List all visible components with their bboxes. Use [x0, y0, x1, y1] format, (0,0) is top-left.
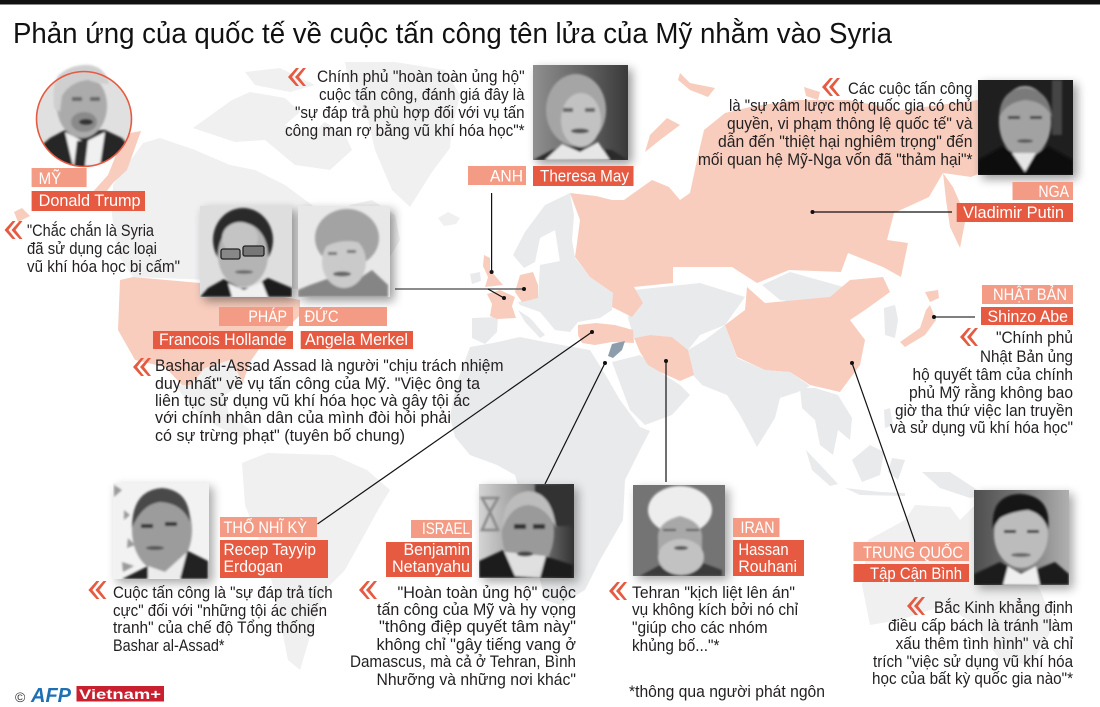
quote: Abe: Nhật Bản ủng [980, 348, 1073, 366]
quote: Netanyahu [350, 584, 576, 689]
label: NHẬT BẢN: NHẬT BẢN [993, 285, 1067, 304]
quote: Netanyahu: "thông điệp quyết tâm này" [379, 618, 576, 636]
top bar [0, 0, 1100, 4]
quote icon [88, 581, 106, 599]
quote: Erdogan: cực" đối với "những tội ác chiến [113, 602, 327, 620]
quote icon [907, 597, 925, 615]
panel: Trung Quốc [854, 490, 1074, 688]
quote: Pháp và Đức: Bashar al-Assad Assad là người "chịu trách nhiệm [155, 357, 504, 375]
label: ANH: ANH [490, 166, 523, 186]
quote: Pháp và Đức: duy nhất" về vụ tấn công của Mỹ. "Việc ông ta [155, 375, 481, 393]
label: Vladimir Putin: Vladimir Putin [963, 203, 1064, 222]
label: Hassan Rouhani [733, 540, 804, 576]
map: UK [483, 255, 503, 287]
quote icon [960, 328, 978, 346]
photo: Hollande [200, 206, 296, 301]
photo: Erdogan [113, 483, 213, 583]
quote: Putin [698, 80, 973, 169]
quote: Xi: điều cấp bách là tránh "làm [888, 617, 1073, 635]
map: USA [14, 131, 300, 385]
quote: Putin: quyền, vi phạm thông lệ quốc tế" và [727, 115, 973, 133]
photo: Putin [978, 80, 1077, 179]
quote: Rouhani: "giúp cho các nhóm [632, 619, 768, 637]
label: Shinzo Abe: Shinzo Abe [988, 307, 1068, 326]
footnote: *thông qua người phát ngôn [629, 683, 825, 701]
label: Angela Merkel: Angela Merkel [305, 330, 408, 349]
quote: Rouhani: vụ không kích bởi nó chỉ [632, 601, 798, 619]
label: THỔ NHĨ KỲ: THỔ NHĨ KỲ [224, 518, 307, 537]
map: Japan [900, 290, 939, 347]
label: Hassan Rouhani: Hassan [738, 540, 789, 559]
quote: Abe: hộ quyết tâm của chính [912, 366, 1073, 384]
map: Russia [570, 73, 1020, 317]
quote: Putin: dẫn đến "thiệt hại nghiêm trọng" đến [718, 132, 972, 151]
panel: Thổ Nhĩ Kỳ [88, 483, 333, 655]
label: TRUNG QUỐC: TRUNG QUỐC [863, 542, 963, 562]
quote: Xi: trích "việc sử dụng vũ khí hóa [873, 653, 1074, 671]
quote: Netanyahu: "Hoàn toàn ủng hộ" cuộc [398, 584, 576, 602]
label: Donald Trump: Donald Trump [39, 191, 141, 210]
quote: Putin: mối quan hệ Mỹ-Nga vốn đã "thảm hại"* [698, 151, 973, 169]
quote: Xi: xấu thêm tình hình" và chỉ [896, 635, 1073, 653]
quote: Trump: đã sử dụng các loại [27, 240, 157, 258]
quote: Abe [890, 329, 1073, 437]
label: Theresa May: Theresa May [540, 166, 629, 186]
photo: Merkel [298, 206, 394, 301]
map: Turkey [578, 323, 634, 345]
panel: Nhật Bản [890, 285, 1073, 437]
photo: Theresa May [533, 65, 632, 164]
label: Benjamin Netanyahu: Benjamin [404, 540, 470, 559]
quote: May: Chính phủ "hoàn toàn ủng hộ" [317, 68, 525, 86]
map: pale grey north and south lands [112, 62, 1055, 670]
quote: Pháp và Đức: có sự trừng phạt" (tuyên bố chung) [155, 427, 405, 445]
quote: Netanyahu: tấn công của Mỹ và hy vọng [377, 601, 576, 619]
logo: AFP Vietnam+ [15, 685, 164, 707]
logo: AFP Vietnam+: Vietnam+ [79, 686, 161, 702]
quote: Netanyahu: Damascus, mà cả ở Tehran, Bình [350, 653, 576, 671]
quote: Pháp và Đức: với chính nhân dân của mình đòi hỏi phải [155, 409, 451, 427]
icon: quote marks [4, 221, 22, 239]
quote: Rouhani: khủng bố..."* [632, 637, 720, 655]
label: Recep Tayyip Erdogan: Erdogan [224, 557, 283, 576]
photo: Netanyahu [479, 484, 578, 582]
label: Benjamin Netanyahu: Netanyahu [392, 557, 470, 576]
label: ISRAEL [411, 519, 472, 538]
quote: Trump: vũ khí hóa học bị cấm" [27, 258, 180, 276]
quote: Erdogan: Bashar al-Assad* [113, 637, 225, 655]
label: ISRAEL: ISRAEL [422, 519, 470, 538]
quote: Netanyahu: không chỉ "gây tiếng vang ở [376, 636, 576, 654]
label: PHÁP: PHÁP [248, 307, 287, 326]
quote: Trump: "Chắc chắn là Syria [27, 221, 155, 240]
label: ĐỨC: ĐỨC [304, 307, 338, 326]
quote: Erdogan: Cuộc tấn công là "sự đáp trả tích [113, 584, 333, 602]
photo: Rouhani [633, 485, 729, 580]
quote: Erdogan [113, 584, 333, 655]
quote: Putin: là "sự xâm lược một quốc gia có chủ [729, 97, 972, 115]
label: MỸ: MỸ [39, 169, 61, 188]
label: PHÁP [219, 307, 293, 326]
photo: Xi Jinping [974, 490, 1073, 589]
label: Francois Hollande: Francois Hollande [159, 330, 287, 349]
quote: May [285, 68, 525, 140]
quote: Xi: Bắc Kinh khẳng định [934, 598, 1073, 617]
panel: Israel [350, 484, 578, 689]
quote: Rouhani [632, 584, 798, 655]
quote: Abe: "Chính phủ [996, 329, 1073, 347]
panel: Trump [4, 65, 180, 276]
label: NGA [1012, 182, 1073, 201]
quote: Rouhani: Tehran "kịch liệt lên án" [632, 584, 795, 602]
panel: Nga [698, 78, 1077, 222]
quote: Trump [27, 221, 180, 276]
label: Recep Tayyip Erdogan [220, 540, 328, 578]
label: Benjamin Netanyahu [386, 540, 472, 577]
label: MỸ [32, 168, 87, 188]
map: China [725, 277, 890, 392]
logo: AFP Vietnam+: AFP [30, 685, 72, 707]
panel: Anh [285, 65, 634, 186]
quote: Netanyahu: Nhưỡng và những nơi khác" [376, 671, 576, 689]
label: Recep Tayyip Erdogan: Recep Tayyip [224, 540, 316, 559]
panel: Pháp và Đức [133, 206, 504, 445]
quote: Abe: giờ tha thứ việc lan truyền [895, 402, 1073, 420]
quote icon [288, 68, 306, 86]
map: grey countries [450, 193, 985, 605]
quote icon [609, 582, 627, 600]
logo: AFP Vietnam+: © [15, 689, 26, 705]
label: NGA: NGA [1038, 182, 1070, 201]
map: Iran [634, 335, 694, 381]
map: Syria [608, 341, 625, 358]
quote: Xi: học của bất kỳ quốc gia nào"* [872, 670, 1074, 688]
photo: Trump [36, 65, 132, 170]
quote icon [133, 358, 151, 376]
quote: May: "sự đáp trả phù hợp đối với vụ tấn [295, 104, 525, 122]
quote: Putin: Các cuộc tấn công [848, 80, 972, 98]
map: France [487, 290, 516, 319]
label: Hassan Rouhani: Rouhani [738, 557, 797, 576]
quote icon [359, 581, 377, 599]
map: Germany [515, 272, 538, 302]
quote: May: cuộc tấn công, đánh giá đây là [319, 86, 525, 104]
label: ANH [468, 166, 526, 186]
label: ĐỨC [299, 307, 387, 326]
quote: May: công man rợ bằng vũ khí hóa học"* [285, 121, 525, 140]
label: IRAN: IRAN [740, 518, 774, 537]
quote: Abe: và sử dụng vũ khí hóa học" [890, 419, 1073, 437]
quote: Pháp và Đức: liên tục sử dụng vũ khí hóa học và gây tội ác [155, 392, 470, 410]
quote: Pháp và Đức [155, 357, 504, 445]
quote: Erdogan: tranh" của chế độ Tổng thống [113, 619, 315, 637]
quote: Abe: phủ Mỹ rằng không bao [909, 383, 1073, 402]
connector lines [318, 193, 975, 542]
quote: Xi [872, 598, 1074, 688]
title: Phản ứng của quốc tế về cuộc tấn công tên lửa của Mỹ nhằm vào Syria [13, 17, 893, 50]
quote icon [822, 78, 840, 96]
panel: Iran [609, 485, 804, 655]
label: Tập Cận Bình: Tập Cận Bình [870, 564, 962, 583]
